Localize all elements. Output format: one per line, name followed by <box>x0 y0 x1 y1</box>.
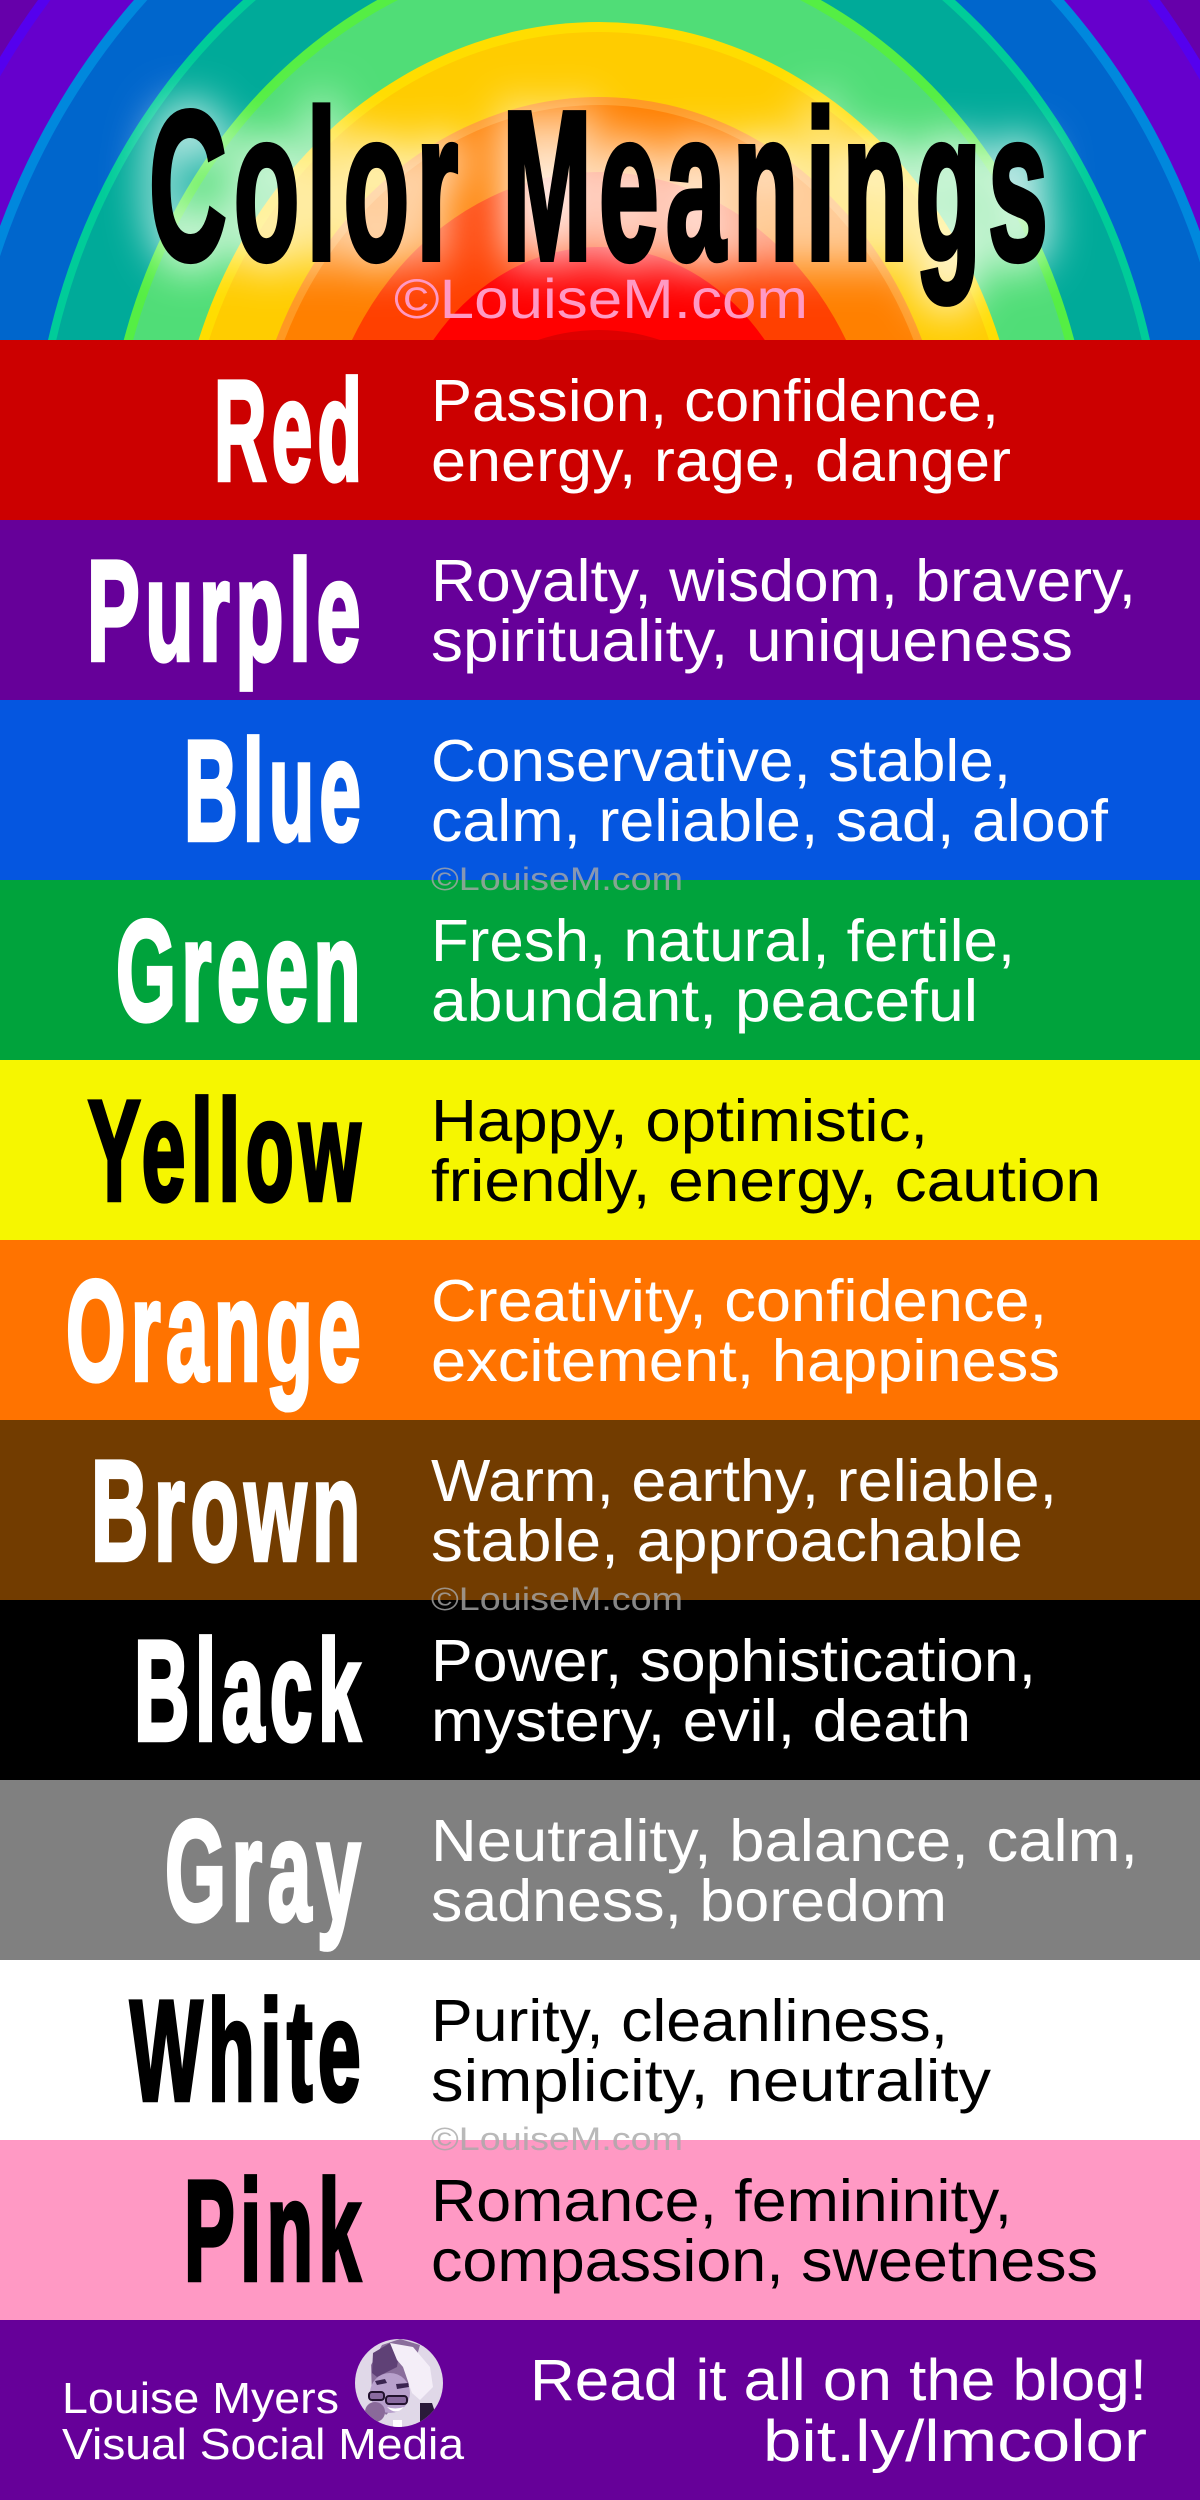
meaning: brown: stable, approachable <box>431 1508 1023 1574</box>
footer author name <box>62 2374 465 2469</box>
row: brown <box>0 1420 1200 1600</box>
meaning: pink: compassion, sweetness <box>431 2228 1098 2294</box>
label: Yellow: Yellow <box>88 1072 366 1231</box>
meaning: blue: calm, reliable, sad, aloof <box>431 788 1109 854</box>
footer call to action <box>530 2348 1147 2474</box>
meaning: brown: Warm, earthy, reliable, <box>431 1448 1057 1514</box>
icon: author portrait <box>355 2339 443 2428</box>
footer author name: Louise Myers <box>62 2374 339 2423</box>
meaning: blue: Conservative, stable, <box>431 728 1011 794</box>
meaning: white: simplicity, neutrality <box>431 2048 992 2114</box>
label: Orange: Orange <box>66 1252 366 1411</box>
meaning: blue <box>431 728 1109 854</box>
meaning: red: energy, rage, danger <box>431 428 1011 494</box>
meaning: red: Passion, confidence, <box>431 368 999 434</box>
footer call to action: bit.ly/lmcolor <box>763 2409 1147 2474</box>
row: white <box>0 1960 1200 2140</box>
meaning: white <box>431 1988 992 2114</box>
meaning: black: mystery, evil, death <box>431 1688 971 1754</box>
meaning: green: abundant, peaceful <box>431 968 978 1034</box>
meaning: green <box>431 908 1015 1034</box>
label: Red: Red <box>214 352 367 511</box>
row: purple <box>0 520 1200 700</box>
meaning: orange <box>431 1268 1060 1394</box>
watermark: blue and green rows: ©LouiseM.com <box>431 861 683 897</box>
header watermark: ©LouiseM.com <box>394 267 808 330</box>
meaning: purple: spirituality, uniqueness <box>431 608 1073 674</box>
row: blue <box>0 700 1200 880</box>
meaning: gray: sadness, boredom <box>431 1868 947 1934</box>
meaning: black: Power, sophistication, <box>431 1628 1036 1694</box>
label: Brown: Brown <box>91 1432 366 1591</box>
label: Gray: Gray <box>165 1792 366 1951</box>
label: Green: Green <box>116 892 366 1051</box>
label: Pink: Pink <box>184 2152 366 2311</box>
row: pink <box>0 2140 1200 2320</box>
footer call to action: Read it all on the blog! <box>530 2348 1147 2413</box>
watermark: brown and black rows: ©LouiseM.com <box>431 1581 683 1617</box>
meaning: gray <box>431 1808 1138 1934</box>
meaning: gray: Neutrality, balance, calm, <box>431 1808 1138 1874</box>
meaning: brown <box>431 1448 1057 1574</box>
meaning: black <box>431 1628 1036 1754</box>
meaning: yellow: friendly, energy, caution <box>431 1148 1101 1214</box>
label: White: White <box>130 1972 366 2131</box>
meaning: yellow: Happy, optimistic, <box>431 1088 928 1154</box>
row: black <box>0 1600 1200 1780</box>
row: gray <box>0 1780 1200 1960</box>
meaning: pink <box>431 2168 1098 2294</box>
meaning: yellow <box>431 1088 1101 1214</box>
meaning: purple <box>431 548 1136 674</box>
meaning: red <box>431 368 1011 494</box>
label: Purple: Purple <box>87 532 366 691</box>
meaning: green: Fresh, natural, fertile, <box>431 908 1015 974</box>
label: Black: Black <box>134 1612 366 1771</box>
footer panel <box>62 2339 1146 2473</box>
footer author name: Visual Social Media <box>62 2420 465 2469</box>
meaning: purple: Royalty, wisdom, bravery, <box>431 548 1136 614</box>
meaning: orange: Creativity, confidence, <box>431 1268 1047 1334</box>
row: green <box>0 880 1200 1060</box>
watermark: white and pink rows: ©LouiseM.com <box>431 2121 683 2157</box>
row: yellow <box>0 1060 1200 1240</box>
meaning: orange: excitement, happiness <box>431 1328 1060 1394</box>
meaning: pink: Romance, femininity, <box>431 2168 1012 2234</box>
row: orange <box>0 1240 1200 1420</box>
label: Blue: Blue <box>184 712 366 871</box>
meaning: white: Purity, cleanliness, <box>431 1988 948 2054</box>
row: red <box>0 340 1200 520</box>
header rainbow background <box>0 0 1200 340</box>
